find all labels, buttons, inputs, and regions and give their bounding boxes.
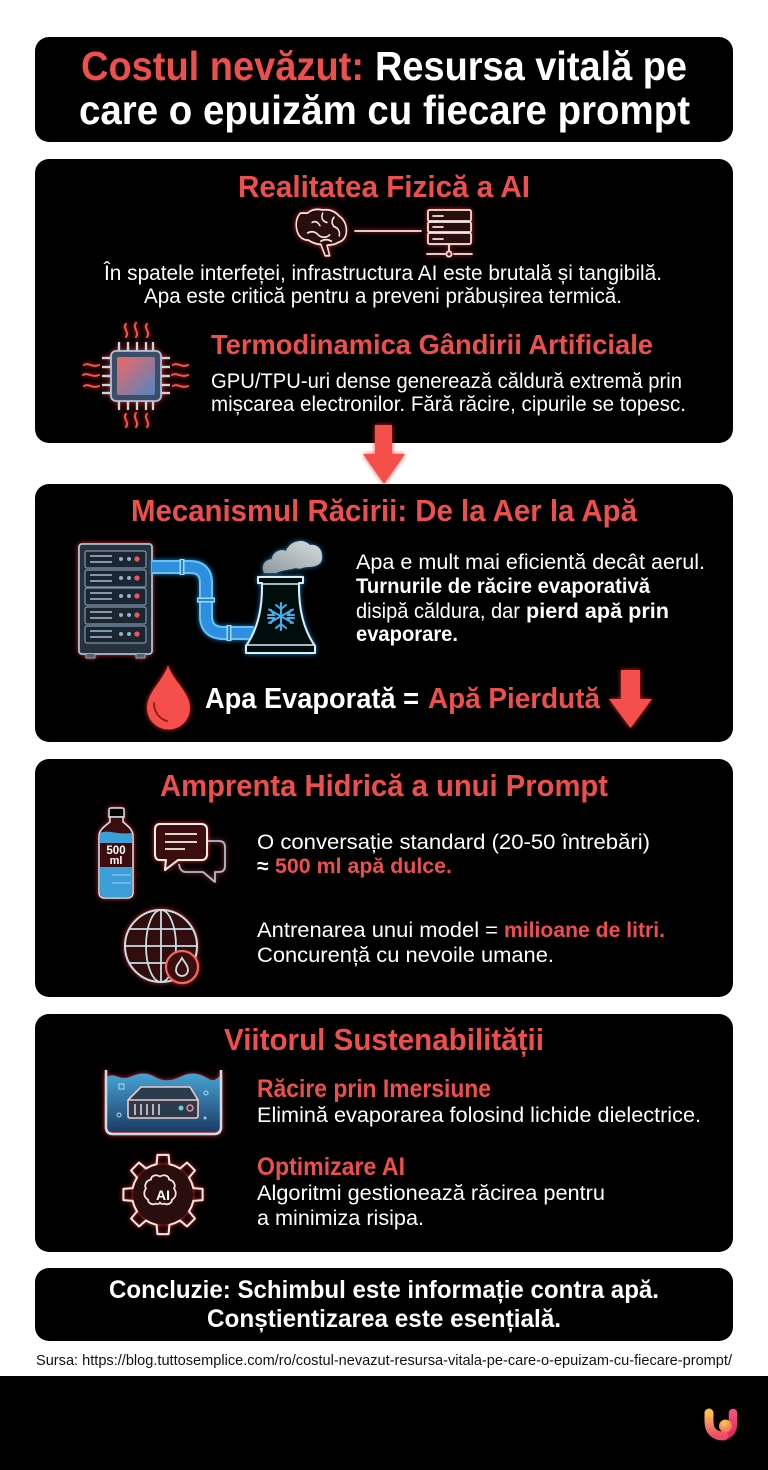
panel: Viitorul Sustenabilității [35, 1014, 733, 1252]
footer band [0, 1376, 768, 1470]
heading: Amprenta Hidrică a unui Prompt [160, 768, 608, 803]
panel: conclusion: Concluzie: Schimbul este informație contra apă. [109, 1276, 659, 1304]
title line 2: care o epuizăm cu fiecare prompt [79, 87, 690, 133]
description text: disipă căldura, dar [356, 600, 520, 623]
source line: Sursa: https://blog.tuttosemplice.com/ro/costul-nevazut-resursa-vitala-pe-care-o-epuizam-cu-fiecare-prompt/ [36, 1352, 733, 1369]
heading: Viitorul Sustenabilității [224, 1022, 544, 1057]
panel: Mecanismul Răcirii [35, 484, 733, 742]
title line 1: Resursa vitală pe [375, 43, 687, 89]
icon: globe with drop badge [125, 910, 198, 983]
icon: 500 ml bottle: 500 [106, 845, 126, 857]
conversation text [257, 831, 650, 878]
description text: pierd apă prin [526, 600, 669, 623]
body text: GPU/TPU-uri dense generează căldură extremă prin [211, 370, 682, 393]
icon: coolant pipe [152, 559, 254, 641]
AI optimisation text: a minimiza risipa. [257, 1207, 424, 1230]
icon: 500 ml bottle: ml [110, 855, 122, 867]
body text: mișcarea electronilor. Fără răcire, cipurile se topesc. [211, 393, 686, 416]
conversation text: ≈ [257, 855, 269, 878]
immersion cooling text [257, 1075, 701, 1127]
icon: AI gear: AI [156, 1187, 170, 1203]
immersion cooling text: Elimină evaporarea folosind lichide dielectrice. [257, 1104, 701, 1127]
icon: logo [709, 1413, 733, 1436]
AI optimisation text [257, 1153, 605, 1230]
description text: Turnurile de răcire evaporativă [356, 575, 650, 598]
icon: 500 ml bottle [99, 808, 133, 898]
icon: brain linked to server [296, 209, 472, 257]
panel: Amprenta Hidrică [35, 759, 733, 997]
conversation text: O conversație standard (20-50 întrebări) [257, 831, 650, 854]
icon: immersion tank [106, 1070, 221, 1134]
panel: conclusion: Conștientizarea este esențială. [207, 1305, 561, 1333]
intro text: În spatele interfeței, infrastructura AI este brutală și tangibilă. [103, 262, 662, 285]
AI optimisation text: Optimizare AI [257, 1153, 405, 1181]
equation: Apă Pierdută [428, 683, 601, 715]
icon: server rack [79, 544, 152, 658]
training text: Concurență cu nevoile umane. [257, 944, 554, 967]
icon: chat bubbles [155, 824, 225, 882]
panel: conclusion [35, 1268, 733, 1341]
conversation text: 500 ml apă dulce. [275, 855, 452, 878]
title panel [35, 37, 733, 142]
intro text: Apa este critică pentru a preveni prăbușirea termică. [144, 285, 622, 308]
icon: hot chip [83, 323, 188, 427]
icon: red water drop [147, 665, 190, 730]
panel: Realitatea Fizică a AI [35, 159, 733, 443]
description text [356, 551, 705, 646]
subheading: Termodinamica Gândirii Artificiale [211, 329, 653, 360]
icon: AI gear [123, 1155, 203, 1234]
arrow: down to cooling panel [363, 425, 405, 484]
training text: milioane de litri. [504, 919, 665, 942]
training text [257, 919, 665, 967]
title line 1 highlight: Costul nevăzut: [81, 43, 364, 89]
body text [211, 370, 686, 416]
description text: Apa e mult mai eficientă decât aerul. [356, 551, 705, 574]
arrow: water lost [609, 670, 652, 728]
equation [205, 683, 601, 715]
AI optimisation text: Algoritmi gestionează răcirea pentru [257, 1182, 605, 1205]
immersion cooling text: Răcire prin Imersiune [257, 1075, 491, 1103]
heading: Mecanismul Răcirii: De la Aer la Apă [131, 493, 638, 528]
training text: Antrenarea unui model = [257, 919, 498, 942]
equation: Apa Evaporată = [205, 683, 419, 715]
heading: Realitatea Fizică a AI [238, 169, 530, 204]
icon: cooling tower with snowflake [246, 541, 322, 653]
description text: evaporare. [356, 623, 458, 646]
intro text [103, 262, 662, 308]
